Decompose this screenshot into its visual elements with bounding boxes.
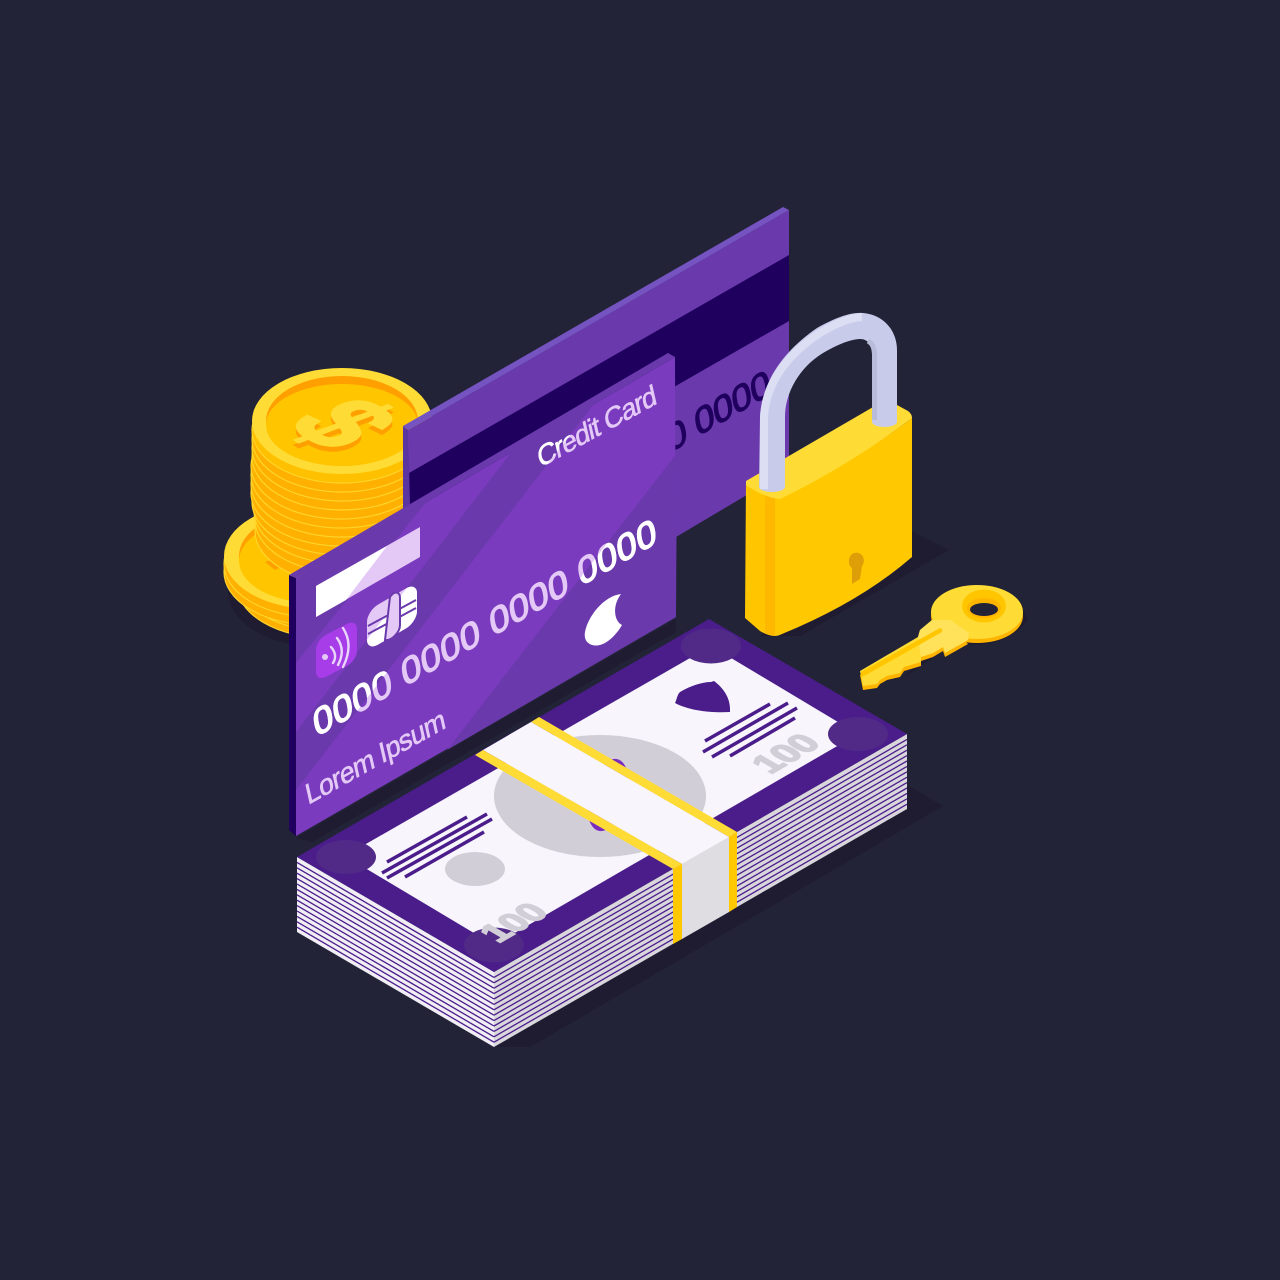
top note border — [297, 619, 907, 972]
key — [860, 585, 1023, 690]
card number: 0000 0000 0000 0000 — [310, 511, 660, 746]
key head — [931, 585, 1023, 639]
stack of banknotes — [297, 619, 907, 1047]
key blade — [860, 620, 969, 686]
shield emblem — [675, 681, 730, 712]
denomination right: 100 — [742, 728, 829, 779]
illustration — [223, 207, 1023, 1047]
denomination left: 100 — [470, 897, 557, 948]
key neck — [918, 620, 969, 657]
chip — [367, 586, 417, 646]
dollar sign: $ — [258, 385, 428, 462]
back card top rim — [403, 207, 789, 430]
signature panel — [316, 527, 420, 617]
front of credit card — [289, 353, 677, 836]
large portrait circle — [494, 735, 706, 857]
lock left side — [745, 481, 775, 636]
card logo — [585, 594, 622, 645]
back card left edge — [403, 426, 410, 510]
right text lines — [703, 703, 797, 757]
note face — [345, 646, 858, 945]
back card number: 0000 0000 — [608, 362, 774, 493]
dollar sign: $ — [258, 390, 428, 467]
card number: 0000 0000 0000 0000 — [310, 511, 660, 746]
coins: stacks — [224, 368, 435, 638]
note corner circles — [316, 628, 888, 962]
lock front — [775, 418, 912, 636]
upper coin stack — [251, 368, 435, 584]
card shading bands — [296, 400, 677, 790]
card top rim — [289, 353, 675, 578]
padlock — [745, 313, 912, 636]
portrait centre — [580, 754, 636, 836]
back of credit card — [403, 207, 789, 690]
card title: Credit Card — [534, 379, 660, 475]
cardholder name: Lorem Ipsum — [303, 703, 449, 812]
key groove — [861, 628, 942, 677]
card title: Credit Card — [534, 379, 660, 475]
key hole — [970, 603, 998, 616]
key ring — [962, 590, 1006, 622]
shackle — [759, 313, 897, 492]
paper strap — [475, 717, 737, 944]
keyhole — [849, 553, 864, 584]
card left edge — [289, 575, 296, 836]
key thickness — [860, 589, 1023, 690]
magnetic stripe — [409, 255, 789, 539]
small seal circle — [445, 852, 505, 886]
lower coin stack — [224, 503, 417, 638]
ground shadows — [228, 528, 1028, 1047]
stack right side — [494, 734, 907, 1047]
contactless badge — [316, 619, 357, 682]
left text lines — [382, 814, 492, 878]
stack left side — [297, 857, 494, 1047]
lock top — [746, 403, 912, 499]
